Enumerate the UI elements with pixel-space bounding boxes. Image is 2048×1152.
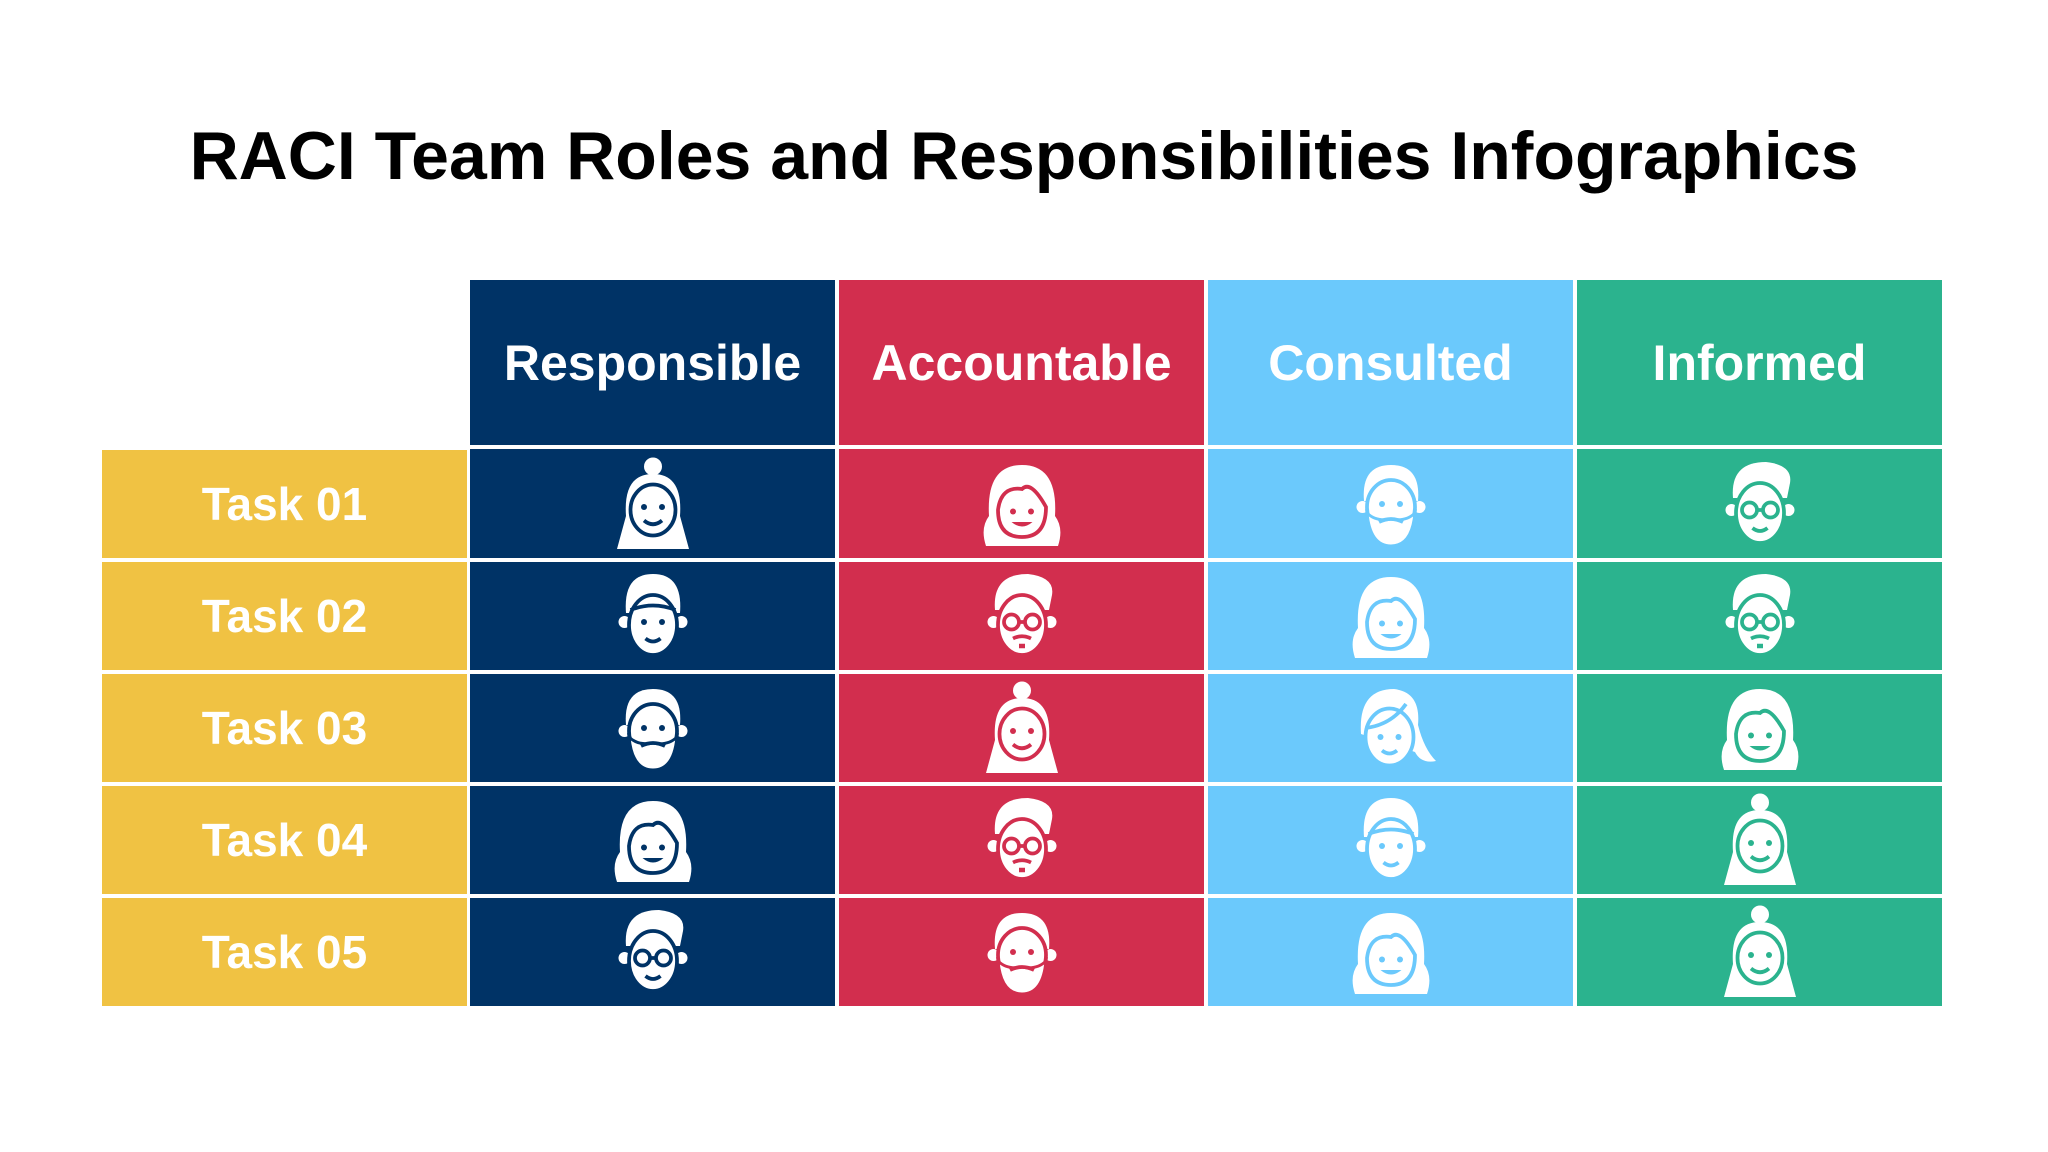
task 05 — [102, 898, 467, 1006]
task 04: Task 04 — [202, 814, 367, 866]
task 05: Task 05 — [202, 926, 367, 978]
row 2 cells — [470, 562, 1942, 670]
header: Consulted — [1208, 280, 1573, 445]
task 02 — [102, 562, 467, 670]
icon: long hair woman — [839, 449, 1204, 558]
header: Accountable: Accountable — [871, 334, 1172, 390]
icon: long hair woman — [470, 786, 835, 894]
header: Responsible: Responsible — [504, 334, 801, 390]
icon: bun woman — [1577, 786, 1942, 894]
task 01 — [102, 450, 467, 558]
row 3 cells — [470, 674, 1942, 782]
task 02: Task 02 — [202, 590, 367, 642]
icon: bun woman — [1577, 898, 1942, 1006]
title: RACI Team Roles and Responsibilities Infographics — [190, 118, 1858, 194]
header: Informed — [1577, 280, 1942, 445]
header: Accountable — [839, 280, 1204, 445]
icon: glasses man with goatee — [839, 562, 1204, 670]
row 1 cells — [470, 449, 1942, 558]
row 4 cells — [470, 786, 1942, 894]
icon: glasses man — [470, 898, 835, 1006]
icon: long hair woman — [1208, 562, 1573, 670]
header: Responsible — [470, 280, 835, 445]
icon: bun woman — [839, 674, 1204, 782]
icon: short hair man — [1208, 786, 1573, 894]
icon: beard man — [470, 674, 835, 782]
task 03: Task 03 — [202, 702, 367, 754]
table — [102, 280, 1942, 1006]
row 5 cells — [470, 898, 1942, 1006]
task 03 — [102, 674, 467, 782]
icon: glasses man — [1577, 562, 1942, 670]
icon: long hair woman — [1208, 898, 1573, 1006]
icon: glasses man — [1577, 449, 1942, 558]
icon: beard man — [1208, 449, 1573, 558]
task 04 — [102, 786, 467, 894]
icon: long hair woman — [1577, 674, 1942, 782]
icon: bun woman — [470, 449, 835, 558]
task 01: Task 01 — [202, 478, 367, 530]
icon: short hair man — [470, 562, 835, 670]
icon: beard man — [839, 898, 1204, 1006]
header: Consulted: Consulted — [1268, 334, 1513, 390]
icon: glasses man with goatee — [839, 786, 1204, 894]
icon: ponytail woman — [1208, 674, 1573, 782]
header: Informed: Informed — [1653, 334, 1866, 390]
